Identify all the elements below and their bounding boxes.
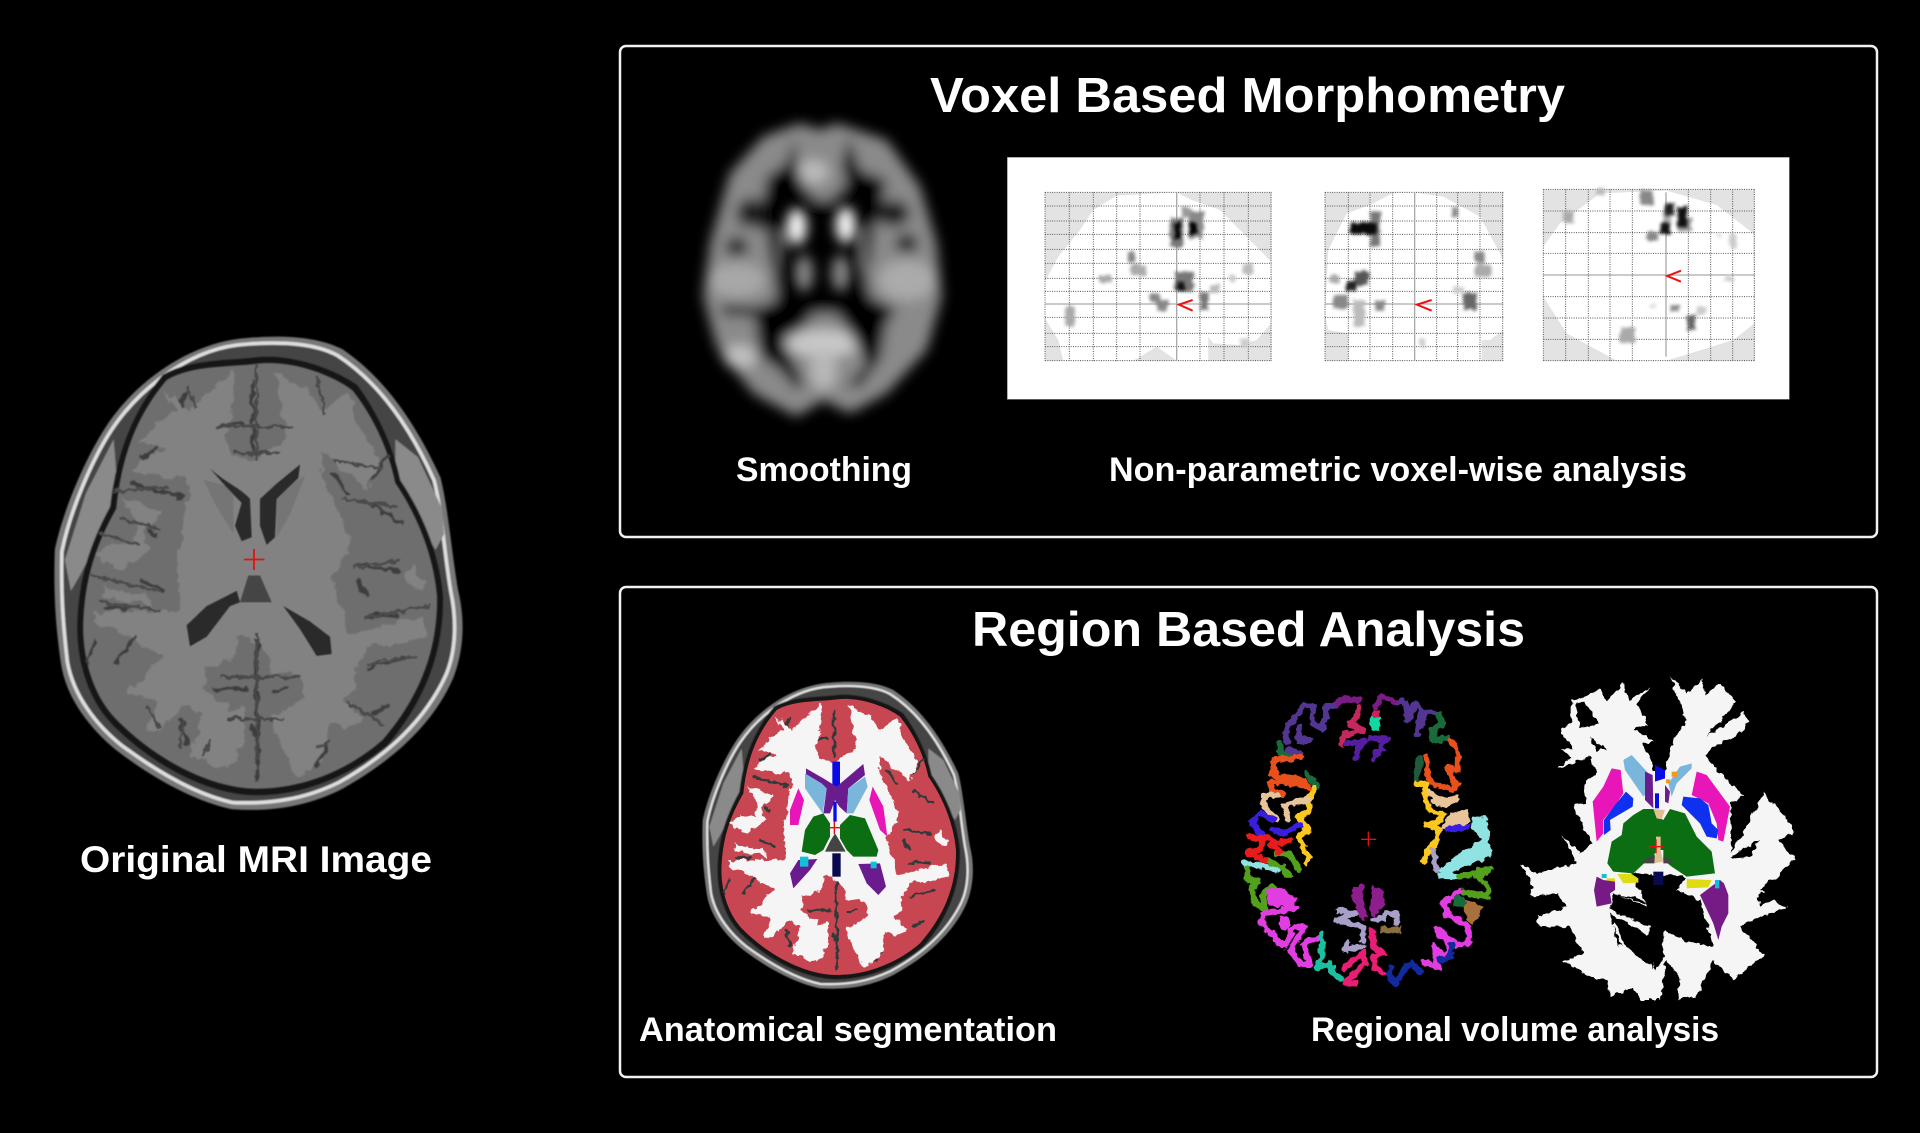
glass brain map 2 xyxy=(1325,192,1503,361)
panel: voxel based morphometry xyxy=(620,46,1877,537)
label: original MRI image: Original MRI Image xyxy=(80,839,432,880)
white background xyxy=(1007,157,1789,399)
ventricles and deep sulci xyxy=(90,365,430,759)
white matter and deep structures map xyxy=(1520,677,1795,1000)
heading: region based analysis: Region Based Analysis xyxy=(972,603,1525,657)
icon: red crosshair xyxy=(1362,832,1376,846)
label: non-parametric voxel-wise analysis: Non-parametric voxel-wise analysis xyxy=(1109,451,1687,489)
panel border xyxy=(620,587,1877,1077)
scalp and skull xyxy=(54,337,463,810)
label: smoothing: Smoothing xyxy=(736,451,912,489)
cortex xyxy=(721,699,956,975)
label: anatomical segmentation: Anatomical segmentation xyxy=(639,1011,1057,1049)
deep nuclei xyxy=(1593,755,1730,940)
subcortical structures xyxy=(790,762,887,895)
brain tissue xyxy=(83,363,437,789)
label: regional volume analysis: Regional volume analysis xyxy=(1311,1011,1719,1049)
white matter xyxy=(728,703,950,968)
smoothed brain image xyxy=(703,123,942,417)
cortical ribbons xyxy=(1245,697,1492,983)
statistical maps panel xyxy=(1007,157,1789,399)
icon: red crosshair xyxy=(244,549,264,570)
cortical dark sulci xyxy=(723,710,933,970)
glass brain map 1 xyxy=(1045,192,1272,361)
original MRI image xyxy=(54,337,463,880)
arrow marker xyxy=(1417,300,1432,311)
panel border xyxy=(620,46,1877,537)
anatomical segmentation brain xyxy=(702,682,973,989)
heading: voxel based morphometry: Voxel Based Morphometry xyxy=(930,69,1565,123)
arrow marker xyxy=(1667,271,1681,282)
cortical regions map xyxy=(1245,697,1492,983)
panel: region based analysis xyxy=(620,587,1877,1077)
scalp xyxy=(702,682,973,989)
glass brain map 3 xyxy=(1543,188,1755,361)
white matter xyxy=(1520,677,1795,1000)
arrow marker xyxy=(1179,300,1193,311)
